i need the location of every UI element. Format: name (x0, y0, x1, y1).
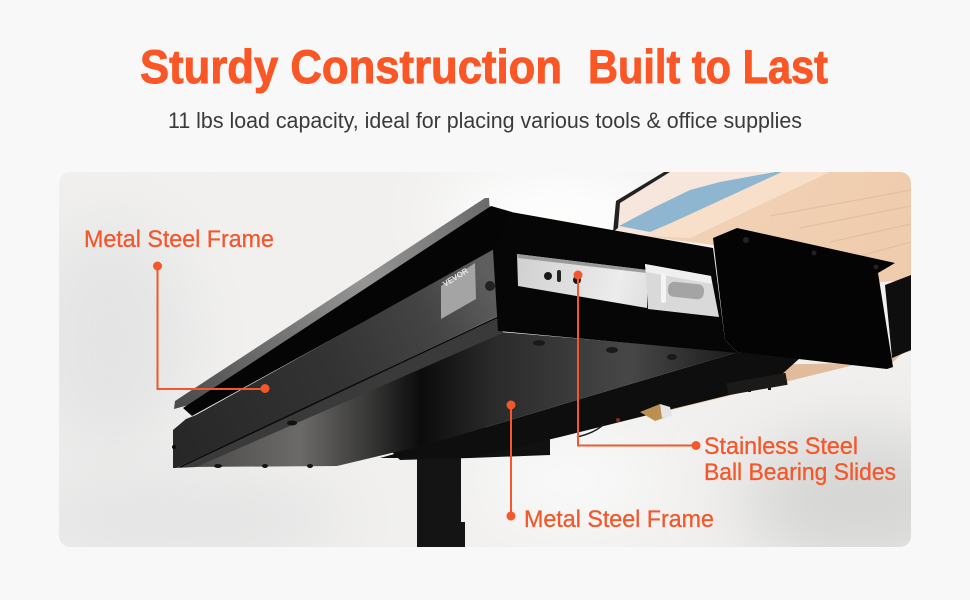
wooden desktop (643, 172, 911, 411)
drawer top lip (174, 198, 490, 409)
ball bearing slide (517, 254, 719, 317)
title (140, 40, 828, 93)
callout: stainless steel slides (574, 270, 896, 486)
subtitle: 11 lbs load capacity, ideal for placing various tools & office supplies (168, 108, 802, 133)
mounting bracket (713, 228, 911, 369)
callout: stainless steel slides: Ball Bearing Slides (704, 459, 896, 486)
callout: stainless steel slides: Stainless Steel (704, 433, 858, 460)
callout: metal steel frame (bottom): Metal Steel Frame (524, 506, 714, 533)
black side of drawer (485, 212, 738, 360)
desk monitor (613, 172, 790, 237)
callout: metal steel frame (bottom) (506, 400, 714, 533)
callout: metal steel frame (top): Metal Steel Frame (84, 226, 274, 253)
callout: metal steel frame (top) (84, 226, 274, 393)
title: Built to Last (588, 40, 828, 93)
title: Sturdy Construction (140, 40, 562, 93)
underside panel of drawer (190, 332, 800, 467)
VEVOR product label (441, 263, 476, 319)
black band under lip (183, 206, 512, 416)
photo background (59, 172, 911, 547)
panel: product photo of desk drawer (59, 172, 911, 547)
desk leg (380, 425, 550, 547)
VEVOR product label: VEVOR (441, 266, 470, 289)
front face (172, 248, 503, 468)
